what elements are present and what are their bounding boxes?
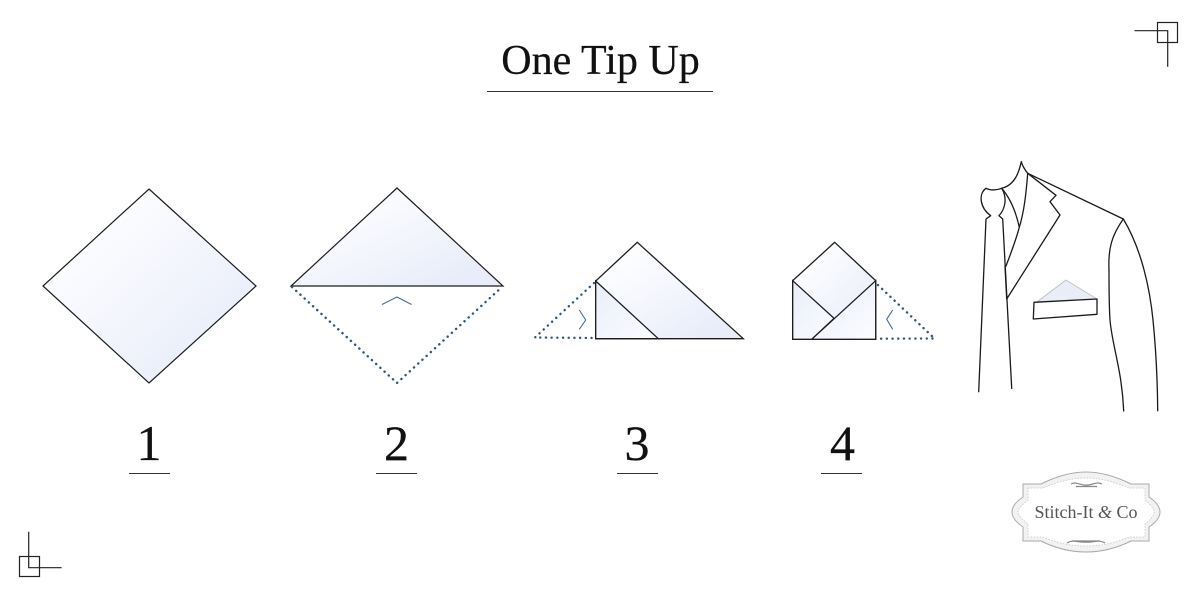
collar and shirt lines — [1002, 173, 1028, 266]
step 3: left corner folded — [535, 242, 743, 339]
badge inner panel — [1018, 478, 1154, 546]
pocket square tip — [1037, 280, 1097, 302]
step number 2: 2 — [384, 415, 409, 471]
sleeve — [1109, 219, 1124, 411]
lapel — [1007, 173, 1060, 299]
step number 1 — [129, 415, 170, 474]
left flap — [793, 281, 834, 339]
breast pocket — [1033, 299, 1097, 319]
tie — [979, 162, 1028, 392]
bottom flourish — [1067, 541, 1105, 543]
step number 4 — [821, 415, 862, 474]
logo badge: Stitch-It & Co — [1012, 472, 1160, 552]
step number 4: 4 — [830, 415, 855, 471]
step 4: right corner folded — [793, 242, 934, 339]
jacket front edge — [1005, 266, 1007, 299]
corner mark: bottom left — [20, 532, 62, 576]
right flap — [812, 281, 876, 339]
inner flap — [596, 281, 658, 339]
fold arrow chevron — [382, 297, 412, 304]
step 1: full diamond square — [43, 189, 256, 383]
step 2: folded in half — [291, 188, 503, 383]
dotted fold outline — [292, 287, 502, 383]
folded shape — [596, 242, 743, 339]
folded triangle — [291, 188, 503, 286]
fold arrow chevron — [887, 310, 893, 329]
badge outline — [1012, 472, 1160, 552]
dotted fold outline — [535, 283, 594, 338]
step number 3: 3 — [624, 415, 650, 471]
badge text: Stitch-It & Co — [1034, 502, 1138, 522]
step number 3 — [617, 415, 658, 474]
folded shape — [793, 242, 876, 339]
top flourish — [1071, 483, 1102, 486]
jacket illustration with finished pocket square — [979, 162, 1158, 411]
dotted fold outline — [878, 285, 934, 339]
fold arrow chevron — [579, 310, 586, 329]
step number 2 — [376, 415, 417, 474]
corner mark: top right — [1134, 22, 1178, 67]
title: One Tip Up — [501, 38, 700, 84]
shoulder — [1028, 173, 1123, 219]
step number 1: 1 — [136, 415, 162, 471]
